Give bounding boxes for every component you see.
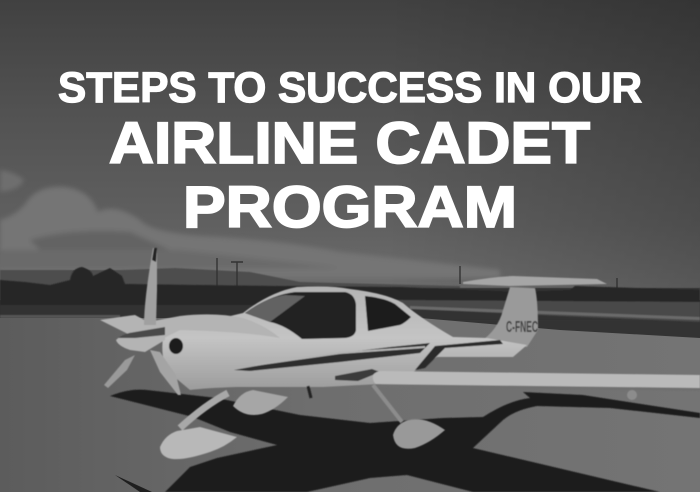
wing tip fairing (627, 390, 637, 400)
side window (365, 296, 411, 331)
nose wheel (160, 427, 237, 459)
windshield (245, 292, 356, 339)
fuselage (162, 286, 527, 390)
sky (0, 0, 700, 300)
tree line and field (0, 267, 700, 322)
propeller blades (144, 248, 157, 325)
tail fin (480, 287, 538, 347)
horizontal stabilizer (463, 276, 607, 286)
propeller spinner (116, 327, 165, 352)
title line 2: AIRLINE CADET (109, 111, 590, 176)
aircraft shadow (110, 390, 700, 492)
wing (373, 371, 700, 390)
cowling top highlight (100, 314, 280, 345)
clouds (0, 170, 500, 278)
fuselage stripes (234, 343, 430, 371)
main wheel right (393, 419, 445, 449)
main wheel left (233, 390, 288, 415)
utility poles (217, 258, 617, 292)
tail stripes (415, 340, 503, 370)
title line 3: PROGRAM (183, 175, 517, 240)
title line 1: STEPS TO SUCCESS IN OUR (58, 64, 642, 112)
runway apron (0, 318, 700, 492)
shadow sliver (115, 475, 152, 492)
distant hills (0, 268, 460, 300)
title (58, 64, 642, 240)
landing gear struts (180, 385, 402, 428)
tail registration: C-FNEC (506, 319, 538, 336)
cowl air intake (169, 338, 183, 354)
wing root shadow (335, 369, 380, 381)
